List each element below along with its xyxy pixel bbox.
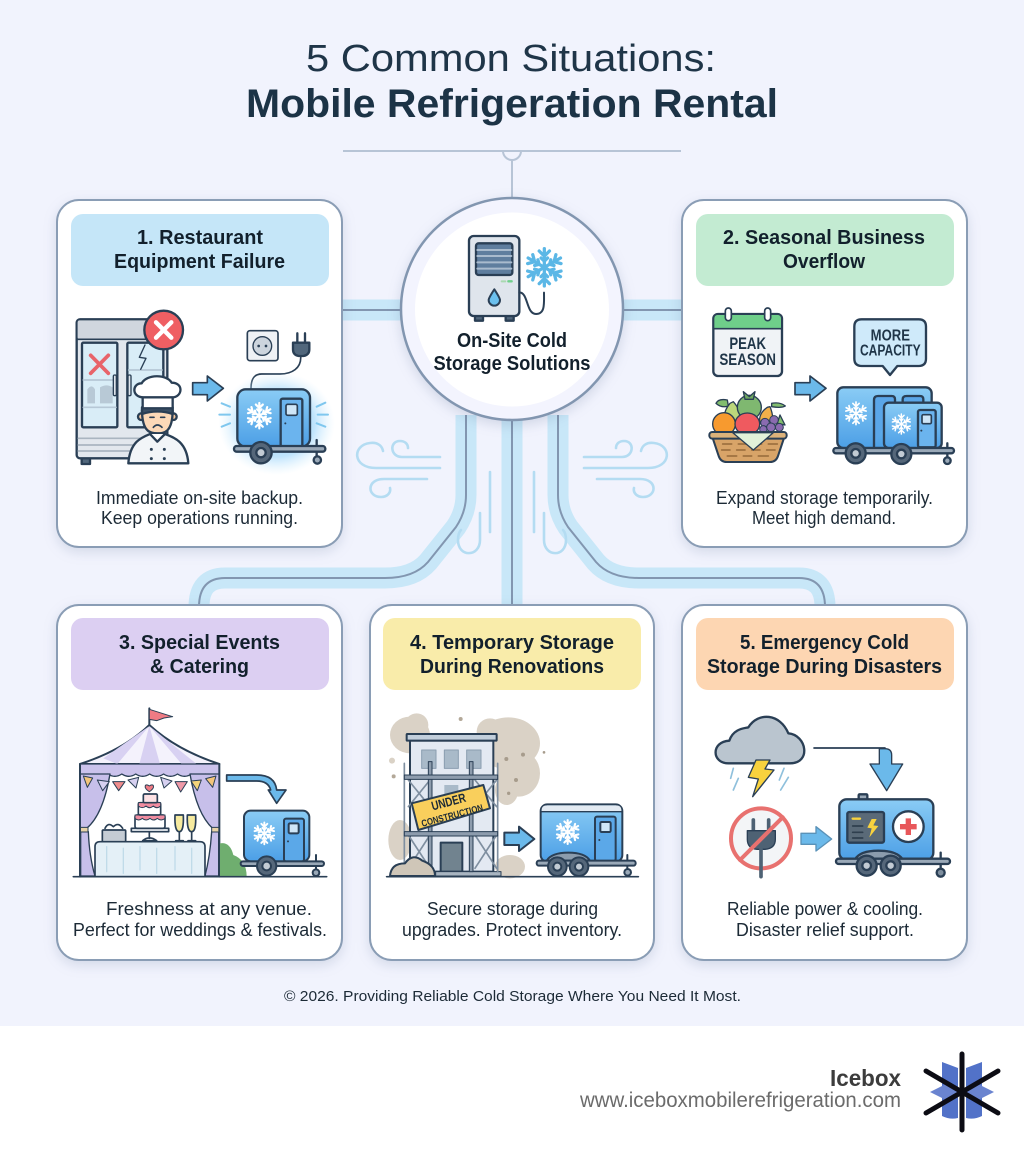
description: upgrades. Protect inventory. bbox=[402, 920, 622, 940]
title: Mobile Refrigeration Rental bbox=[246, 82, 778, 126]
icon: peak season calendar: SEASON bbox=[719, 351, 776, 369]
icon: fruit basket bbox=[709, 392, 787, 462]
description bbox=[402, 899, 622, 940]
description: Expand storage temporarily. bbox=[716, 488, 933, 508]
heading: 1. Restaurant bbox=[137, 226, 263, 249]
hub label: On-Site Cold bbox=[457, 329, 567, 352]
footer brand text bbox=[579, 1065, 901, 1112]
copyright line: © 2026. Providing Reliable Cold Storage Where You Need It Most. bbox=[284, 988, 741, 1005]
description: Keep operations running. bbox=[101, 508, 298, 528]
description: Secure storage during bbox=[427, 899, 598, 919]
icon: bush bbox=[220, 843, 247, 877]
icon group: construction site and trailer bbox=[387, 713, 638, 878]
sign: under construction: UNDER bbox=[430, 791, 467, 813]
description bbox=[73, 899, 327, 940]
panel: 5 emergency cold storage during disasters bbox=[682, 605, 967, 960]
heading bbox=[696, 214, 954, 286]
rubble pile bbox=[390, 857, 435, 876]
panel: 4 temporary storage during renovations bbox=[370, 605, 654, 960]
card frame bbox=[57, 200, 342, 547]
sign: under construction bbox=[412, 785, 490, 830]
title: 5 Common Situations: bbox=[306, 38, 716, 80]
connector pipes bbox=[199, 310, 825, 607]
sign: under construction: CONSTRUCTION bbox=[420, 803, 484, 830]
callout: more capacity: MORE bbox=[871, 327, 910, 344]
dust clouds bbox=[388, 713, 545, 878]
description: Perfect for weddings & festivals. bbox=[73, 920, 327, 940]
icon group: tent, arrow, trailer bbox=[73, 708, 327, 877]
hub label bbox=[434, 329, 590, 375]
description: Immediate on-site backup. bbox=[96, 488, 303, 508]
ground line bbox=[73, 874, 327, 879]
card frame bbox=[370, 605, 654, 960]
icon: storm cloud bbox=[716, 717, 804, 797]
description: Meet high demand. bbox=[752, 508, 896, 528]
callout: more capacity: CAPACITY bbox=[860, 343, 921, 360]
panel: center hub bbox=[401, 198, 623, 420]
heading: Overflow bbox=[783, 250, 865, 273]
description: Disaster relief support. bbox=[736, 920, 914, 940]
panel: 2 seasonal business overflow bbox=[682, 200, 967, 547]
footer band bbox=[0, 1026, 1024, 1154]
icon group: calendar, basket, trailers bbox=[709, 308, 954, 464]
ground line bbox=[387, 874, 638, 879]
arrow bbox=[227, 775, 286, 803]
heading bbox=[71, 618, 329, 690]
icon: two trailers bbox=[833, 387, 954, 464]
description bbox=[716, 488, 933, 528]
icon: wall outlet bbox=[247, 331, 278, 361]
logo: icebox snowflake bbox=[926, 1054, 998, 1130]
hub label: Storage Solutions bbox=[434, 352, 590, 375]
card frame bbox=[57, 605, 342, 960]
hanger connector bbox=[343, 151, 681, 200]
heading: During Renovations bbox=[420, 655, 604, 678]
heading: 3. Special Events bbox=[119, 631, 280, 654]
description bbox=[727, 899, 923, 940]
callout: more capacity bbox=[854, 319, 926, 375]
description bbox=[96, 488, 303, 528]
card frame bbox=[682, 605, 967, 960]
icon: plug and cable bbox=[251, 333, 309, 389]
heading: 4. Temporary Storage bbox=[410, 631, 614, 654]
heading: Storage During Disasters bbox=[707, 655, 942, 678]
arrow bbox=[795, 376, 826, 401]
icon: portable cooling unit bbox=[469, 236, 563, 321]
heading: Equipment Failure bbox=[114, 250, 285, 273]
panel: 3 special events and catering bbox=[57, 605, 342, 960]
icon: trailer bbox=[537, 804, 636, 876]
icon: failed refrigerator bbox=[77, 311, 183, 464]
icon: no power plug bbox=[731, 808, 791, 877]
description: Freshness at any venue. bbox=[106, 899, 312, 919]
icon: generator trailer bbox=[836, 794, 950, 877]
arrow bbox=[504, 827, 534, 851]
heading: 5. Emergency Cold bbox=[740, 631, 909, 654]
icon: event tent with cake bbox=[80, 708, 219, 877]
icon: peak season calendar: PEAK bbox=[729, 335, 766, 353]
description: Reliable power & cooling. bbox=[727, 899, 923, 919]
arrow: storm to trailer bbox=[814, 748, 903, 791]
heading: 2. Seasonal Business bbox=[723, 226, 925, 249]
arrow bbox=[193, 376, 223, 401]
icon: trailer bbox=[241, 811, 324, 876]
heading: & Catering bbox=[150, 655, 249, 678]
icon: broken fridge with chef, backup trailer bbox=[77, 311, 335, 475]
wind swirls bbox=[357, 441, 667, 553]
panel: 1 restaurant equipment failure bbox=[57, 200, 342, 547]
icon: building under scaffolding bbox=[404, 734, 501, 876]
heading bbox=[71, 214, 329, 286]
footer brand text: www.iceboxmobilerefrigeration.com bbox=[579, 1089, 901, 1112]
title bbox=[246, 38, 778, 126]
footer brand text: Icebox bbox=[830, 1065, 901, 1091]
heading bbox=[696, 618, 954, 690]
arrow bbox=[801, 827, 832, 851]
icon: glowing trailer bbox=[218, 372, 335, 475]
icon: peak season calendar bbox=[713, 308, 782, 376]
icon group: storm, no power, generator trailer bbox=[716, 717, 950, 877]
heading bbox=[383, 618, 641, 690]
icon: worried chef bbox=[128, 376, 188, 463]
card frame bbox=[682, 200, 967, 547]
